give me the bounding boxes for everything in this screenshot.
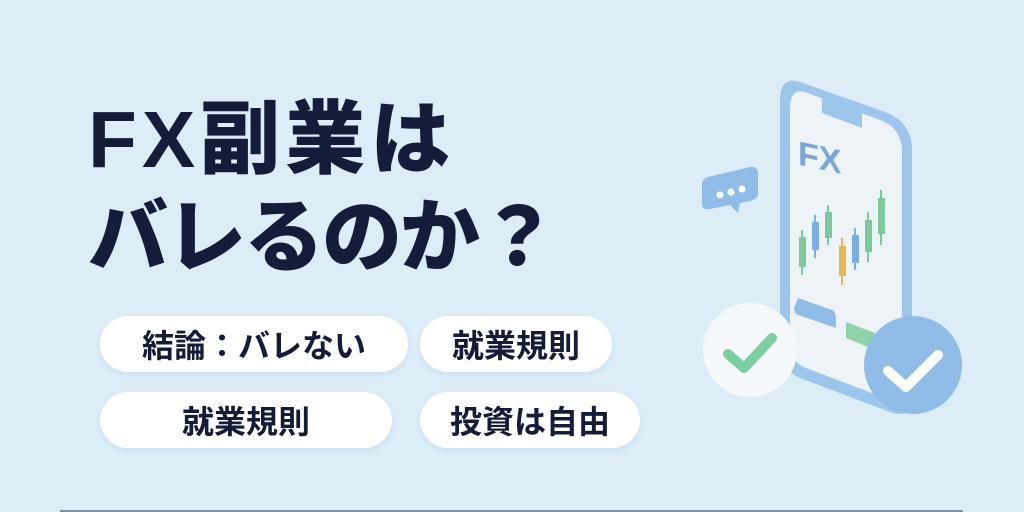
- pill: rules 1: [420, 316, 612, 372]
- pill: conclusion: [100, 316, 408, 372]
- pill: conclusion: 結論：バレない: [142, 328, 366, 364]
- pill: rules 1: 就業規則: [452, 328, 580, 364]
- title: [88, 95, 556, 282]
- title: FX副業は: [88, 95, 455, 184]
- icon: white check: [703, 303, 796, 397]
- pill: rules 2: 就業規則: [182, 404, 310, 440]
- pill: investment: 投資は自由: [450, 404, 610, 440]
- icon: chat bubble: [702, 166, 758, 213]
- title: バレるのか？: [88, 193, 556, 282]
- pill: rules 2: [100, 392, 392, 448]
- icon: blue check: [864, 316, 962, 414]
- pill: investment: [420, 392, 640, 448]
- illustration: phone: FX: [798, 135, 842, 182]
